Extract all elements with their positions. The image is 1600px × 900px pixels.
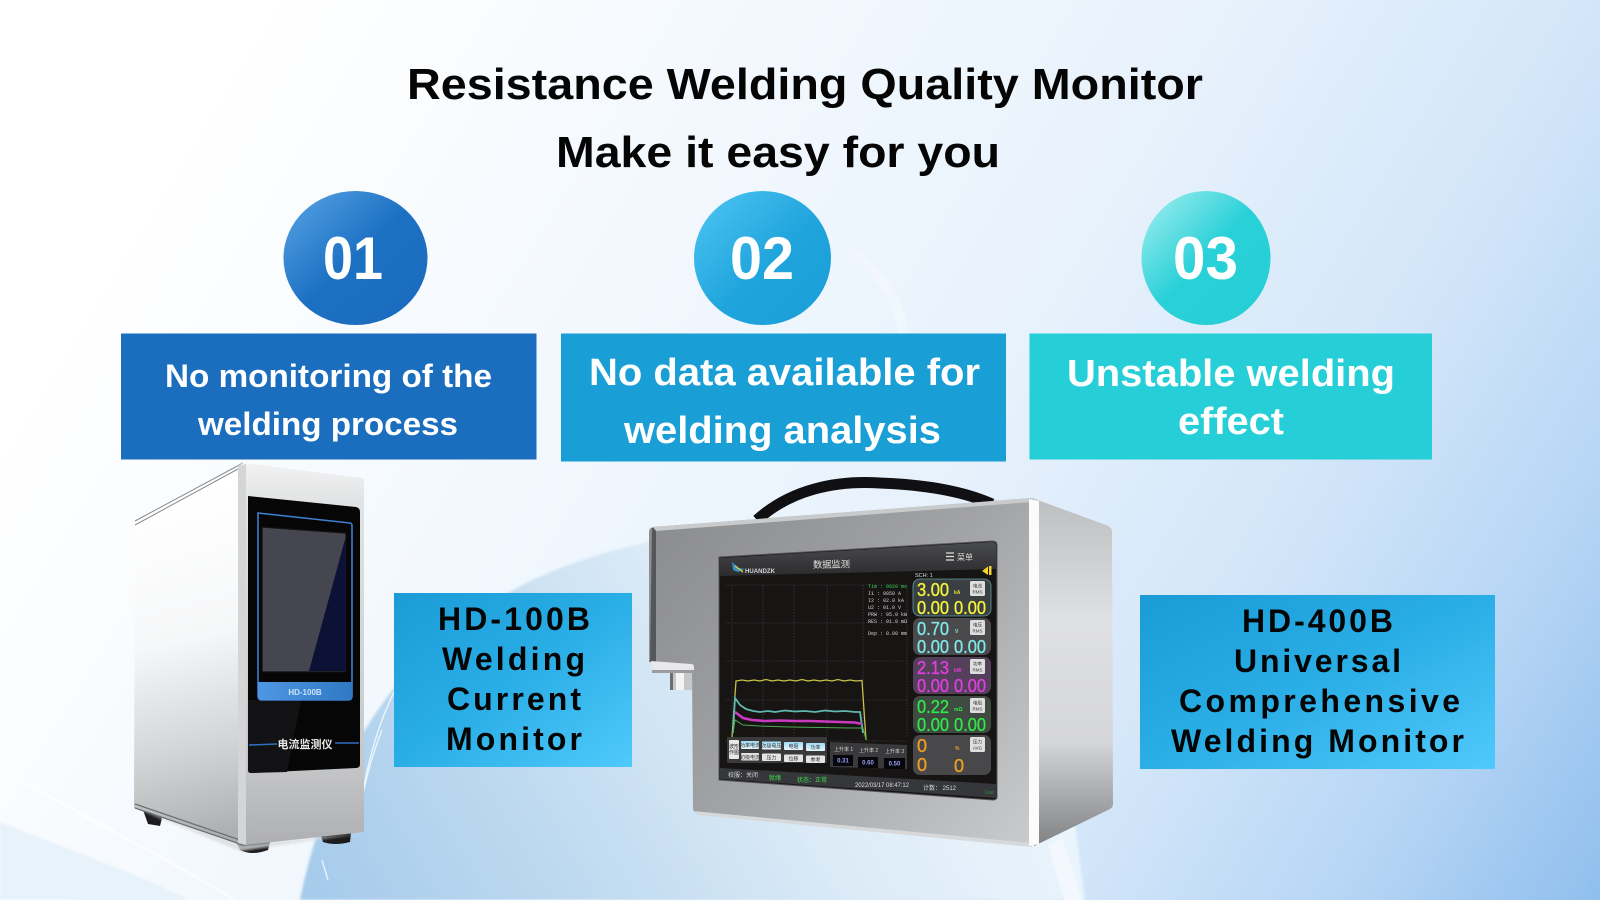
black front panel xyxy=(248,496,360,773)
rise rate readouts: 上升率 2 xyxy=(859,747,878,754)
front label xyxy=(249,737,359,751)
readout: resistance: 0.00 xyxy=(917,715,949,735)
label: HD-400B xyxy=(1140,595,1495,769)
readout: current: 0.00 xyxy=(954,598,986,618)
device feet xyxy=(143,810,351,853)
label: HD-100B: Current xyxy=(447,681,581,717)
readout: current: 电流 xyxy=(973,582,982,590)
chart readouts: I1 : 0050 A xyxy=(868,591,901,597)
title: Resistance Welding Quality Monitor xyxy=(407,60,1203,109)
touch screen xyxy=(719,541,997,800)
readout: current xyxy=(913,579,991,618)
readout: power: 0.00 xyxy=(954,676,986,696)
problem box 1 xyxy=(121,334,536,460)
label: HD-400B: Universal xyxy=(1234,643,1401,679)
status bar: 计数： 2512 xyxy=(923,784,957,792)
readout: resistance: mΩ xyxy=(954,707,962,713)
readout: voltage: 0.70 xyxy=(917,619,949,639)
label: HD-100B: Welding xyxy=(442,641,585,677)
chart readouts xyxy=(868,584,907,637)
screen header: 数据监测 xyxy=(813,558,850,571)
rise rate readouts: 0.60 xyxy=(862,760,874,766)
badge 02: 02 xyxy=(730,225,794,292)
badge 03 xyxy=(1142,191,1270,325)
problem box 2: welding analysis xyxy=(623,410,941,452)
front label: 电流监测仪 xyxy=(278,737,332,751)
rise rate readouts: 0.31 xyxy=(837,758,849,764)
rise rate readouts: 0.50 xyxy=(889,762,901,768)
rise rate readouts: 上升率 1 xyxy=(834,746,853,753)
side face xyxy=(134,463,243,845)
badge 03: 03 xyxy=(1173,225,1238,292)
screen header xyxy=(720,542,996,576)
connector xyxy=(651,661,694,690)
readout: resistance: 0.22 xyxy=(917,697,949,717)
waveform buttons: 次级电压 xyxy=(761,742,782,750)
bright corner edge xyxy=(1029,499,1039,846)
problem box 1: No monitoring of the xyxy=(165,358,492,394)
readout: pressure: % xyxy=(955,746,960,752)
readout: pressure: 压力 xyxy=(973,738,982,746)
readout: power: 功率 xyxy=(973,660,982,668)
badge 01: 01 xyxy=(323,225,383,292)
chart readouts: Dep : 0.00 mm xyxy=(868,631,907,637)
status bar: 校服：关闭 xyxy=(728,771,758,779)
problem box 2 xyxy=(561,334,1006,462)
side face xyxy=(1032,498,1113,846)
front face xyxy=(238,463,364,845)
readout: power: 2.13 xyxy=(917,658,949,678)
model plate xyxy=(258,682,352,700)
title xyxy=(407,60,1203,177)
label: HD-100B xyxy=(394,593,632,767)
waveform buttons: 位移 xyxy=(788,756,799,762)
readout: power: RMS xyxy=(972,668,982,672)
badge 01 xyxy=(284,191,428,325)
front face xyxy=(649,498,1032,846)
screen glass xyxy=(262,527,346,672)
readout: pressure: 0 xyxy=(917,755,927,775)
waveform buttons: 功率电流 xyxy=(740,742,760,749)
readout: voltage: 0.00 xyxy=(917,637,949,657)
waveform buttons: 参考 xyxy=(810,756,821,764)
rise rate readouts xyxy=(830,742,907,769)
label: HD-100B: Monitor xyxy=(446,721,582,757)
touch screen: SCH: 1 xyxy=(915,573,933,579)
readout: voltage: RMS xyxy=(972,628,982,634)
chart readouts: Tim : 0020 ms xyxy=(868,584,907,590)
waveform buttons xyxy=(727,737,827,764)
chart readouts: PRW : 05.0 kW xyxy=(868,612,907,618)
readout: pressure: 0 xyxy=(954,756,964,776)
readout: pressure: AVG xyxy=(973,746,983,750)
status bar: 状态：正常 xyxy=(797,776,827,784)
problem box 3: effect xyxy=(1178,401,1284,443)
readout: power xyxy=(913,657,991,696)
carrying handle xyxy=(757,482,992,520)
label: HD-100B: HD-100B xyxy=(438,601,590,637)
readout: voltage: 电压 xyxy=(973,622,982,628)
label: HD-400B: Welding Monitor xyxy=(1171,723,1464,759)
chart readouts: RES : 01.0 mΩ xyxy=(868,619,907,625)
readout: current: kA xyxy=(954,590,961,596)
problem box 3 xyxy=(1030,334,1432,460)
device: HD-100B monitor xyxy=(134,463,364,853)
speaker icon xyxy=(982,566,992,575)
readout: power: 0.00 xyxy=(917,676,949,696)
readout: voltage: V xyxy=(955,629,959,635)
waveform buttons: 初级电流 xyxy=(740,754,760,761)
waveform buttons: 波形 xyxy=(729,743,739,750)
readout: power: kW xyxy=(954,668,962,674)
waveform chart xyxy=(725,578,909,741)
status bar xyxy=(720,768,996,798)
waveform buttons: 电阻 xyxy=(788,743,799,750)
badge 02 xyxy=(694,191,831,325)
problem box 3: Unstable welding xyxy=(1067,353,1395,395)
readout: voltage xyxy=(913,618,991,657)
status bar: 2022/03/17 08:47:12 xyxy=(855,783,910,789)
problem box 2: No data available for xyxy=(589,352,980,394)
status bar: 就绪 xyxy=(769,774,781,782)
waveform buttons: 功率 xyxy=(810,744,821,751)
readout: resistance: 0.00 xyxy=(954,715,986,735)
readout: resistance: RMS xyxy=(972,706,982,712)
rise rate readouts: 上升率 3 xyxy=(885,748,904,755)
display frame xyxy=(258,513,352,700)
waveform buttons: 作图 xyxy=(729,749,739,756)
label: HD-400B: Comprehensive xyxy=(1179,683,1460,719)
readout: current: 0.00 xyxy=(917,598,949,618)
chart readouts: U2 : 01.0 V xyxy=(868,605,901,611)
chart readouts: I2 : 02.0 kA xyxy=(868,598,904,604)
readout: resistance: 电阻 xyxy=(973,700,982,706)
waveform buttons: 压力 xyxy=(766,754,777,762)
status bar: Use xyxy=(985,790,994,796)
screen header: 菜单 xyxy=(957,552,973,562)
readout: pressure xyxy=(913,735,991,776)
title: Make it easy for you xyxy=(556,128,1000,177)
screen header: HUANDZK xyxy=(745,568,775,575)
readout: current: 3.00 xyxy=(917,580,949,600)
label: HD-400B: HD-400B xyxy=(1242,603,1393,639)
readout: resistance xyxy=(913,696,991,735)
device: HD-400B monitor xyxy=(649,482,1113,847)
model plate: HD-100B xyxy=(288,688,322,697)
readout: voltage: 0.00 xyxy=(954,637,986,657)
problem box 1: welding process xyxy=(197,406,458,442)
readout: current: RMS xyxy=(972,590,982,594)
readout: pressure: 0 xyxy=(917,736,927,756)
